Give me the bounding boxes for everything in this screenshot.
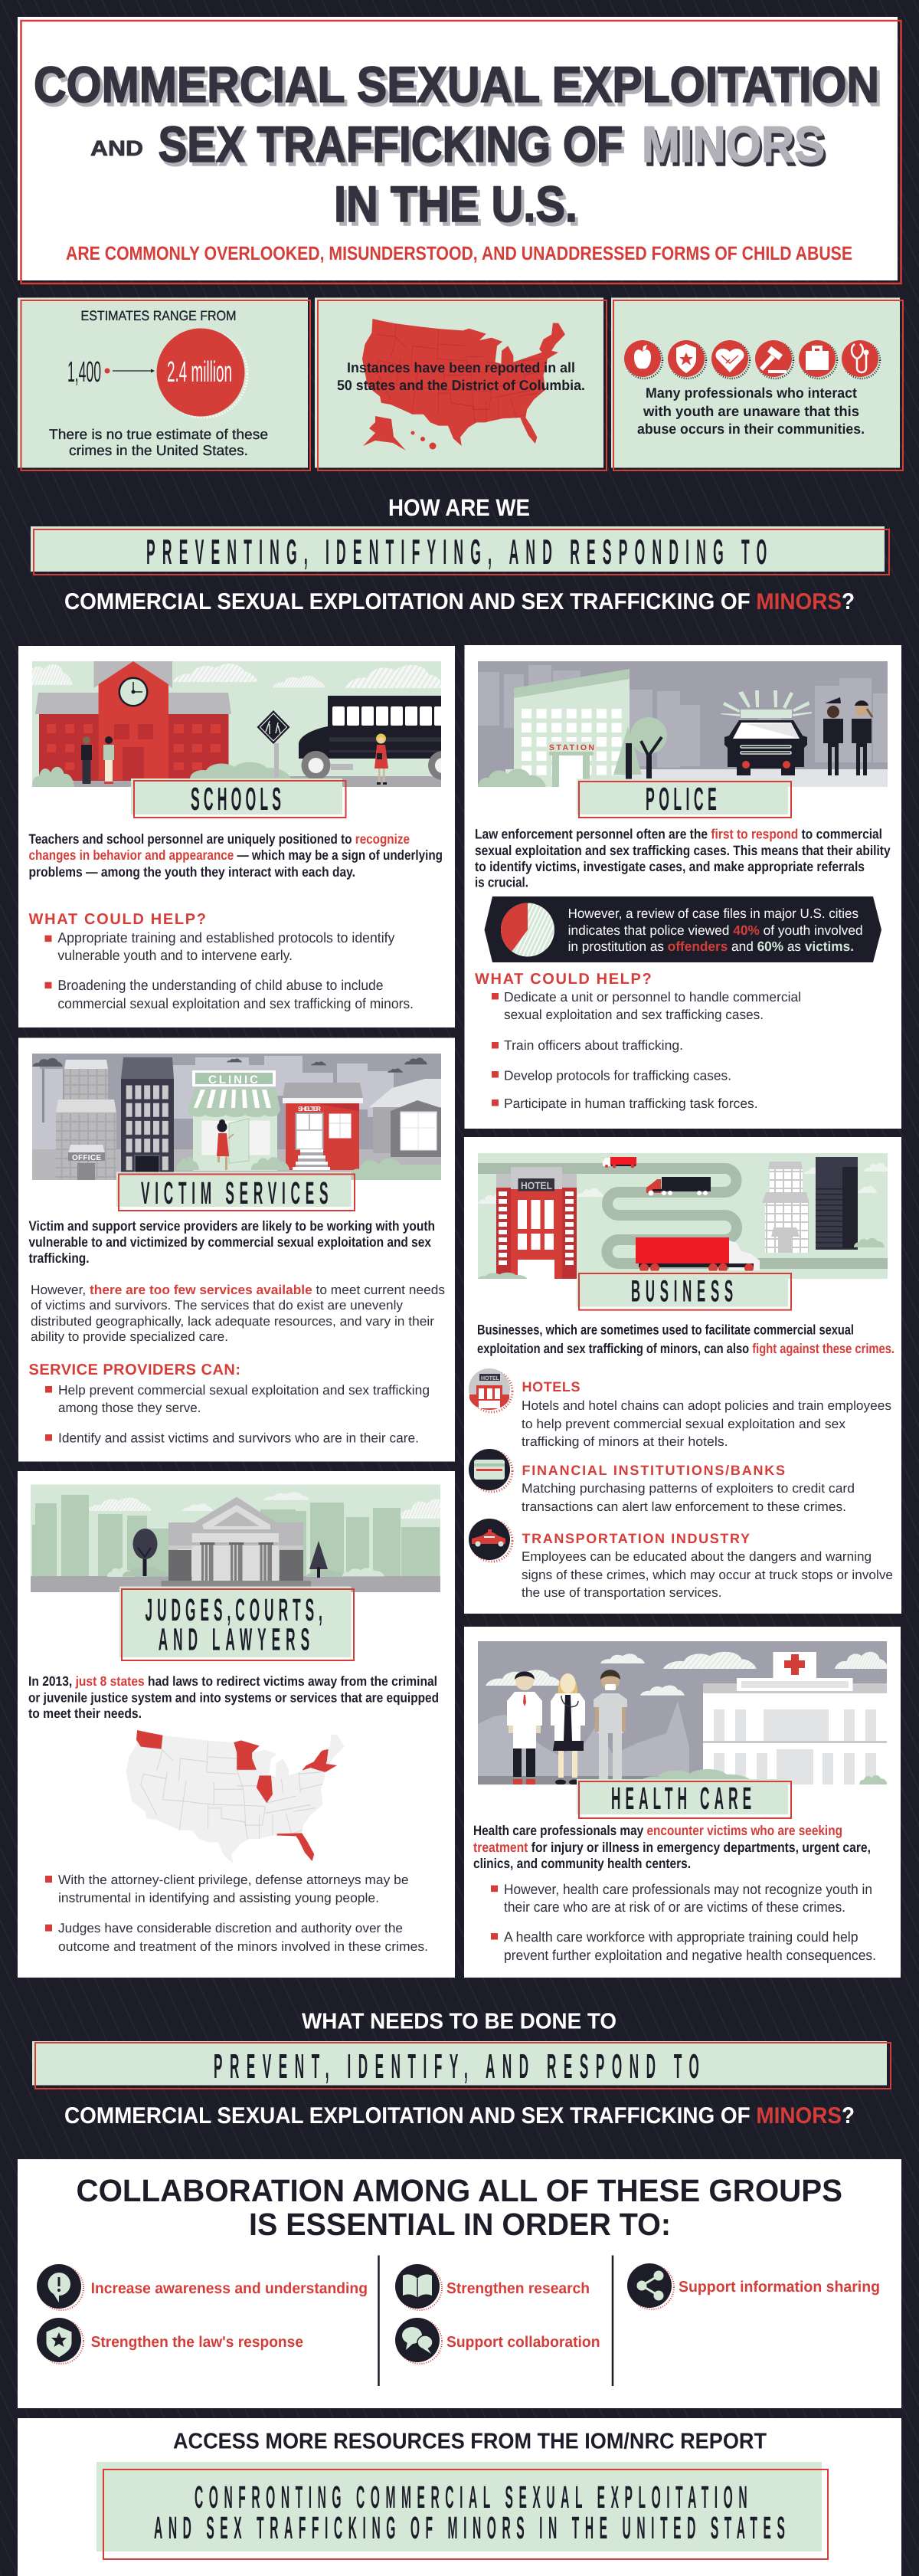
panel: business bbox=[464, 1137, 901, 1614]
panel: professionals unaware bbox=[611, 297, 903, 470]
text: no true estimate: There is no true estimate of these bbox=[49, 426, 268, 442]
list: police help: sexual exploitation and sex trafficking cases. bbox=[504, 1007, 764, 1022]
icon: taxi bbox=[469, 1519, 512, 1562]
list: service providers bbox=[45, 1382, 430, 1446]
icon row: six professions bbox=[624, 340, 880, 379]
banner: report title bbox=[96, 2462, 828, 2559]
panel: victim services bbox=[18, 1037, 455, 1462]
text: many professionals: Many professionals who interact bbox=[646, 385, 857, 401]
item: support collaboration: Support collaboration bbox=[446, 2334, 600, 2351]
illustration: police station, car and officers: STATION bbox=[549, 743, 594, 752]
panel: schools bbox=[15, 646, 457, 1027]
title: MINORS bbox=[644, 120, 827, 176]
text: businesses intro bbox=[477, 1322, 894, 1356]
list: police help: Train officers about trafficking. bbox=[504, 1037, 683, 1053]
text: health care intro: Health care professionals may encounter victims who are seeking bbox=[473, 1823, 842, 1838]
callout: case file review bbox=[484, 896, 881, 962]
label: health care: HEALTH CARE bbox=[611, 1781, 751, 1816]
text: just 8 states bbox=[28, 1673, 439, 1721]
text: health care intro bbox=[473, 1823, 871, 1871]
panel: estimates range bbox=[18, 297, 310, 470]
text: teachers intro: changes in behavior and appearance — which may be a sign of underlying bbox=[29, 847, 443, 863]
text: no true estimate: crimes in the United States. bbox=[69, 442, 248, 458]
illustration: clinic, shelter and office street: CLINIC bbox=[208, 1073, 258, 1086]
illustration: police station, car and officers bbox=[478, 661, 888, 788]
list: service providers: among those they serve. bbox=[58, 1400, 201, 1415]
item: strengthen research: Strengthen research bbox=[446, 2280, 590, 2297]
item: strengthen law's response: Strengthen the law's response bbox=[91, 2334, 303, 2351]
text: just 8 states: In 2013, just 8 states had laws to redirect victims away from the criminal bbox=[28, 1673, 437, 1689]
item: increase awareness: Increase awareness and understanding bbox=[91, 2280, 368, 2297]
text: no true estimate bbox=[49, 426, 268, 458]
list: health care bbox=[491, 1881, 876, 1963]
text: teachers intro: Teachers and school personnel are uniquely positioned to recognize bbox=[29, 831, 410, 847]
heading: collaboration is essential: IS ESSENTIAL IN ORDER TO: bbox=[249, 2207, 671, 2242]
panel: judges, courts, and lawyers bbox=[18, 1471, 456, 1978]
heading: service providers can: SERVICE PROVIDERS CAN: bbox=[29, 1362, 240, 1378]
list: health care: their care who are at risk of or are victims of these crimes. bbox=[504, 1899, 845, 1915]
text: just 8 states: or juvenile justice system and into systems or services that are equipped bbox=[28, 1689, 439, 1705]
text: hotels bbox=[522, 1379, 891, 1449]
title bbox=[34, 56, 882, 236]
list: schools help: vulnerable youth and to intervene early. bbox=[57, 947, 293, 963]
text: financial institutions: FINANCIAL INSTITUTIONS/BANKS bbox=[522, 1463, 785, 1478]
text: health care intro: clinics, and community health centers. bbox=[473, 1856, 691, 1871]
text: instances reported: 50 states and the District of Columbia. bbox=[337, 377, 585, 393]
text: many professionals bbox=[637, 385, 865, 437]
list: service providers: Identify and assist victims and survivors who are in their care. bbox=[58, 1431, 419, 1446]
title: AND bbox=[90, 136, 143, 160]
list: service providers: Help prevent commercial sexual exploitation and sex trafficking bbox=[58, 1382, 430, 1398]
text: victim services intro: trafficking. bbox=[29, 1250, 89, 1266]
text: transportation industry: signs of these crimes, which may occur at truck stops or involve bbox=[522, 1568, 893, 1582]
item: strengthen law's response bbox=[37, 2318, 303, 2364]
text: victim services intro: vulnerable to and victimized by commercial sexual exploitation and sex bbox=[29, 1234, 431, 1250]
text: many professionals: with youth are unaware that this bbox=[643, 403, 859, 419]
panel: title header bbox=[18, 17, 901, 283]
banner: preventing, identifying, and responding to bbox=[31, 526, 889, 575]
label: business: BUSINESS bbox=[631, 1275, 733, 1309]
text: victim services intro bbox=[29, 1218, 435, 1266]
item: support information sharing: Support information sharing bbox=[679, 2279, 880, 2296]
subheading: COMMERCIAL SEXUAL EXPLOITATION AND SEX TRAFFICKING OF MINORS? bbox=[64, 589, 855, 615]
label: schools bbox=[131, 778, 346, 818]
section heading: how are we: HOW ARE WE bbox=[388, 494, 530, 521]
text: hotels: Hotels and hotel chains can adopt policies and train employees bbox=[522, 1398, 891, 1413]
illustration: clinic, shelter and office street: OFFICE bbox=[72, 1154, 101, 1162]
item: support information sharing bbox=[627, 2263, 880, 2309]
text: financial institutions: transactions can alert law enforcement to these crimes. bbox=[522, 1499, 846, 1514]
label: police: POLICE bbox=[646, 781, 717, 817]
list: police help: Dedicate a unit or personnel to handle commercial bbox=[504, 989, 801, 1005]
heading: collaboration is essential: COLLABORATION AMONG ALL OF THESE GROUPS bbox=[77, 2173, 842, 2208]
text: too few services bbox=[31, 1283, 445, 1344]
list: schools help bbox=[44, 929, 414, 1011]
text: law enforcement intro: Law enforcement personnel often are the first to respond to commercial bbox=[475, 826, 882, 841]
text: teachers intro bbox=[29, 831, 443, 880]
text: law enforcement intro: is crucial. bbox=[475, 875, 528, 890]
list: attorneys and judges: With the attorney-client privilege, defense attorneys may be bbox=[58, 1873, 409, 1887]
heading: estimates range from: ESTIMATES RANGE FROM bbox=[81, 308, 236, 323]
text: transportation industry: TRANSPORTATION INDUSTRY bbox=[522, 1531, 750, 1546]
banner: preventing, identifying, and responding to: PREVENTING, IDENTIFYING, AND RESPONDING TO bbox=[146, 532, 767, 572]
item: strengthen research bbox=[395, 2264, 590, 2310]
list: attorneys and judges: outcome and treatment of the minors involved in these crimes. bbox=[58, 1939, 428, 1954]
banner: report title: AND SEX TRAFFICKING OF MINORS IN THE UNITED STATES bbox=[154, 2510, 785, 2545]
list: schools help: Broadening the understanding of child abuse to include bbox=[57, 977, 383, 993]
heading: what could help: WHAT COULD HELP? bbox=[475, 971, 652, 988]
text: too few services: ability to provide specialized care. bbox=[31, 1329, 228, 1344]
illustration: hotel, trucks and offices bbox=[478, 1153, 889, 1280]
text: too few services: distributed geographically, lack adequate resources, and vary in their bbox=[31, 1314, 434, 1329]
list: attorneys and judges: instrumental in identifying and assisting young people. bbox=[58, 1891, 379, 1906]
icon: credit card bbox=[469, 1449, 512, 1492]
title: IN THE U.S. bbox=[337, 179, 581, 236]
icon: hotel bbox=[469, 1368, 512, 1412]
list: police help: Participate in human trafficking task forces. bbox=[504, 1096, 758, 1111]
icon: hotel: HOTEL bbox=[481, 1375, 499, 1381]
section heading: how are we bbox=[31, 494, 889, 615]
label: police bbox=[577, 779, 791, 818]
callout: case file review: indicates that police viewed 40% of youth involved bbox=[568, 923, 863, 938]
list: attorneys and judges: Judges have considerable discretion and authority over the bbox=[58, 1921, 403, 1935]
text: financial institutions bbox=[522, 1463, 855, 1514]
text: just 8 states: to meet their needs. bbox=[28, 1706, 142, 1721]
list: attorneys and judges bbox=[45, 1873, 428, 1954]
illustration: clinic, shelter and office street bbox=[32, 1054, 441, 1181]
text: teachers intro: problems — among the youth they interact with each day. bbox=[29, 864, 355, 880]
text: hotels: to help prevent commercial sexual exploitation and sex bbox=[522, 1417, 846, 1431]
list: health care: However, health care professionals may not recognize youth in bbox=[504, 1881, 872, 1897]
section heading: what needs to be done: WHAT NEEDS TO BE DONE TO bbox=[302, 2010, 616, 2034]
map: states with safe harbor laws bbox=[126, 1730, 345, 1863]
text: transportation industry: Employees can be educated about the dangers and warning bbox=[522, 1549, 872, 1564]
title: SEX TRAFFICKING OF bbox=[161, 120, 626, 176]
illustration: hospital and medical staff bbox=[478, 1641, 888, 1785]
illustration: hotel, trucks and offices: HOTEL bbox=[521, 1180, 552, 1191]
title: IN THE U.S. bbox=[334, 175, 577, 232]
label: judges, courts, and lawyers: AND LAWYERS bbox=[159, 1622, 309, 1657]
panel: collaboration bbox=[18, 2159, 901, 2408]
text: financial institutions: Matching purchasing patterns of exploiters to credit card bbox=[522, 1481, 855, 1496]
title: MINORS bbox=[642, 116, 825, 172]
list: police help: Develop protocols for trafficking cases. bbox=[504, 1068, 731, 1083]
heading: access more resources: ACCESS MORE RESOURCES FROM THE IOM/NRC REPORT bbox=[173, 2430, 767, 2454]
text: transportation industry bbox=[522, 1531, 893, 1600]
item: increase awareness bbox=[37, 2264, 368, 2310]
range chart: 1,400 to 2.4 million bbox=[67, 328, 247, 418]
text: law enforcement intro bbox=[475, 826, 891, 890]
item: support collaboration bbox=[395, 2318, 600, 2364]
text: many professionals: abuse occurs in their communities. bbox=[637, 421, 865, 437]
illustration: clinic, shelter and office street: SHELTER bbox=[298, 1105, 321, 1113]
text: instances reported: Instances have been reported in all bbox=[347, 359, 575, 375]
text: victim services intro: Victim and support service providers are likely to be working with youth bbox=[29, 1218, 435, 1234]
banner: prevent, identify, and respond to: PREVENT, IDENTIFY, AND RESPOND TO bbox=[214, 2047, 699, 2086]
range chart: 1,400 to 2.4 million: 1,400 bbox=[67, 356, 101, 388]
text: transportation industry: the use of transportation services. bbox=[522, 1585, 721, 1600]
panel: access resources bbox=[18, 2418, 901, 2576]
callout: case file review: in prostitution as offenders and 60% as victims. bbox=[568, 939, 854, 954]
label: schools: SCHOOLS bbox=[191, 781, 281, 817]
title: SEX TRAFFICKING OF bbox=[158, 116, 623, 172]
list: schools help: commercial sexual exploitation and sex trafficking of minors. bbox=[57, 995, 414, 1011]
label: health care bbox=[577, 1779, 791, 1818]
text: law enforcement intro: to identify victims, investigate cases, and make appropriate referrals bbox=[475, 859, 865, 874]
subheading: COMMERCIAL SEXUAL EXPLOITATION AND SEX TRAFFICKING OF MINORS? bbox=[64, 2103, 855, 2129]
list: police help bbox=[492, 989, 801, 1111]
label: judges, courts, and lawyers bbox=[119, 1586, 354, 1660]
list: health care: prevent further exploitation and negative health consequences. bbox=[504, 1947, 876, 1963]
section heading: what needs to be done bbox=[32, 2010, 891, 2129]
text: too few services: However, there are too few services available to meet current needs bbox=[31, 1283, 445, 1297]
text: hotels: HOTELS bbox=[522, 1379, 581, 1395]
text: health care intro: treatment for injury or illness in emergency departments, urgent care, bbox=[473, 1840, 871, 1855]
label: victim services: VICTIM SERVICES bbox=[141, 1175, 328, 1211]
list: schools help: Appropriate training and established protocols to identify bbox=[57, 929, 395, 946]
text: businesses intro: exploitation and sex trafficking of minors, can also fight against these crimes. bbox=[477, 1341, 894, 1356]
label: business bbox=[577, 1271, 791, 1310]
range chart: 1,400 to 2.4 million: 2.4 million bbox=[167, 356, 232, 388]
pie chart: 40% offenders, 60% victims bbox=[501, 903, 554, 956]
heading: what could help: WHAT COULD HELP? bbox=[29, 911, 206, 928]
illustration: school, bus and students bbox=[15, 661, 457, 787]
callout: case file review: However, a review of case files in major U.S. cities bbox=[568, 906, 858, 921]
panel: police bbox=[464, 645, 901, 1129]
map: United States bbox=[362, 319, 565, 451]
list: health care: A health care workforce with appropriate training could help bbox=[504, 1929, 858, 1945]
text: too few services: of victims and survivors. The services that do exist are unevenly bbox=[31, 1298, 403, 1313]
text: instances reported bbox=[337, 359, 585, 393]
heading: collaboration is essential bbox=[77, 2173, 842, 2242]
banner: prevent, identify, and respond to bbox=[32, 2041, 891, 2089]
banner: report title: CONFRONTING COMMERCIAL SEXUAL EXPLOITATION bbox=[195, 2479, 747, 2515]
illustration: courthouse bbox=[31, 1485, 456, 1592]
text: hotels: trafficking of minors at their hotels. bbox=[522, 1434, 728, 1449]
label: judges, courts, and lawyers: JUDGES,COURTS, bbox=[146, 1592, 322, 1627]
panel: reported in all states bbox=[315, 297, 607, 470]
panel: health care bbox=[464, 1627, 901, 1978]
